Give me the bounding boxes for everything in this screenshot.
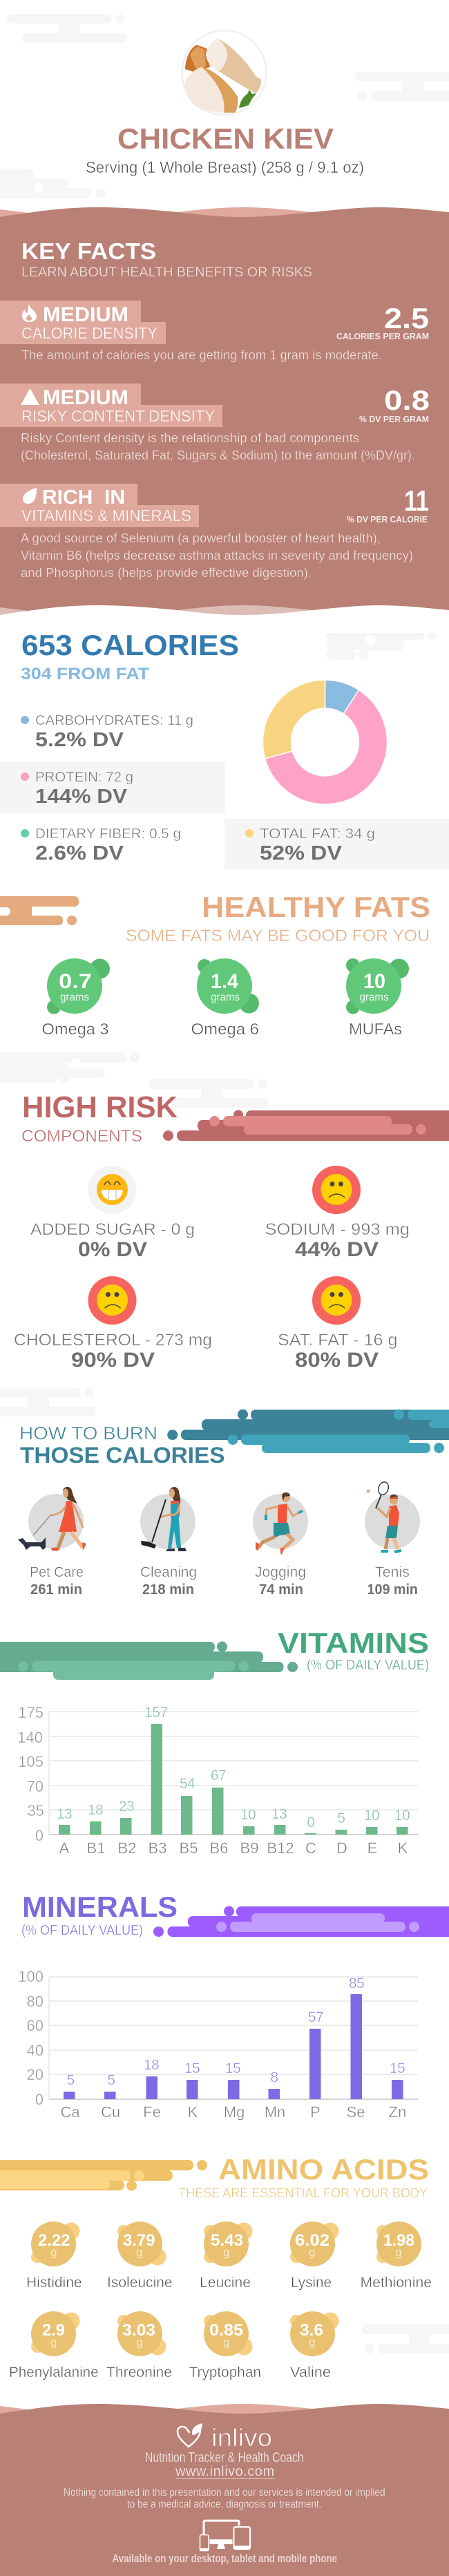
panel: high risk components (14, 1090, 449, 1372)
label: CALORIE DENSITY (21, 324, 157, 342)
badge: omega 3: grams (60, 992, 89, 1003)
bar chart: vitamins (17, 1704, 418, 1857)
bar chart: vitamins: B2 (118, 1839, 136, 1857)
logo wordmark: inlivo (211, 2423, 272, 2452)
row: carbohydrates: CARBOHYDRATES: 11 g (35, 713, 193, 728)
panel: key facts (0, 207, 449, 633)
row: dietary fiber: 2.6% DV (35, 842, 124, 864)
subheading: THESE ARE ESSENTIAL FOR YOUR BODY (178, 2186, 428, 2201)
donut chart (262, 680, 387, 804)
badge: leucine (200, 2222, 253, 2291)
description: Vitamin B6 (helps decrease asthma attacks in severity and frequency) (21, 549, 413, 562)
logo icon (178, 2423, 202, 2447)
heading: HEALTHY FATS (202, 891, 430, 923)
badge: lysine: Lysine (291, 2275, 332, 2291)
panel: amino acids (0, 2153, 432, 2380)
disclaimer: to be a medical advice, diagnosis or treatment. (127, 2499, 322, 2510)
bar chart: vitamins: B3 (149, 1839, 166, 1857)
row: carbohydrates: 5.2% DV (35, 729, 124, 751)
panel: how to burn (18, 1410, 449, 1598)
badge: methionine (361, 2222, 432, 2291)
badge: lysine: g (309, 2246, 315, 2259)
item: saturated fat (278, 1276, 398, 1372)
badge: mufas: MUFAs (349, 1020, 402, 1038)
description: and Phosphorus (helps provide effective digestion). (21, 566, 312, 580)
bar chart: vitamins: 23 (119, 1799, 134, 1815)
bar chart: minerals: 57 (308, 2009, 323, 2025)
item: sodium: SODIUM - 993 mg (265, 1220, 410, 1239)
bar chart: vitamins: A (59, 1839, 70, 1857)
badge: isoleucine (107, 2222, 173, 2291)
duration: 74 min (259, 1582, 303, 1598)
badge: tryptophan (189, 2311, 261, 2380)
icon: leaf (23, 488, 37, 504)
bar chart: vitamins: C (305, 1839, 316, 1857)
badge: isoleucine: Isoleucine (107, 2275, 173, 2291)
unit: CALORIES PER GRAM (336, 331, 429, 341)
duration: 109 min (367, 1582, 418, 1598)
bar chart: minerals: Ca (61, 2103, 80, 2121)
panel: vitamins (0, 1627, 429, 1857)
bar chart: vitamins: 157 (144, 1705, 168, 1721)
bar chart: minerals: 40 (27, 2042, 44, 2059)
bar chart: minerals: 15 (390, 2061, 405, 2076)
decorative bars (0, 896, 79, 925)
decorative bars (0, 1642, 298, 1680)
bar chart: vitamins: B6 (210, 1839, 228, 1857)
badge: histidine: Histidine (26, 2275, 82, 2291)
item: added sugar: ADDED SUGAR - 0 g (30, 1220, 195, 1239)
bar chart: minerals: 15 (225, 2061, 240, 2076)
bar chart: minerals: Cu (101, 2103, 120, 2121)
row: dietary fiber: DIETARY FIBER: 0.5 g (35, 826, 181, 842)
description: Risky Content density is the relationship of bad components (21, 431, 359, 445)
fact: calorie density (0, 301, 429, 362)
badge: mufas (346, 958, 409, 1038)
value: 2.5 (384, 302, 429, 334)
label: Cleaning (140, 1564, 197, 1580)
badge: histidine (26, 2222, 82, 2291)
bar chart: vitamins: 70 (27, 1778, 44, 1795)
badge: tryptophan: 0.85 (209, 2321, 243, 2340)
bar chart: vitamins: 175 (18, 1704, 44, 1721)
availability note: Available on your desktop, tablet and mobile phone (112, 2552, 337, 2565)
bar chart: minerals: 60 (27, 2017, 44, 2034)
label: Jogging (255, 1564, 306, 1580)
row: protein: PROTEIN: 72 g (35, 770, 133, 785)
badge: threonine: 3.03 (122, 2321, 155, 2340)
bar chart: vitamins: K (398, 1839, 408, 1857)
subheading: COMPONENTS (21, 1127, 142, 1146)
rating: MEDIUM (43, 303, 128, 326)
badge: methionine: Methionine (361, 2275, 432, 2291)
heading: 653 CALORIES (21, 629, 239, 661)
value: 11 (404, 484, 429, 517)
panel: calories (0, 629, 449, 869)
decorative bars (167, 1410, 449, 1453)
badge: mufas: grams (359, 992, 388, 1003)
bar chart: minerals: 85 (349, 1976, 364, 1991)
label: Tenis (375, 1564, 410, 1580)
bar chart: minerals: 5 (66, 2072, 75, 2088)
subheading: 304 FROM FAT (21, 665, 149, 683)
bar chart: vitamins: 105 (18, 1753, 44, 1770)
item: cholesterol (14, 1276, 212, 1372)
badge: phenylalanine: Phenylalanine (9, 2365, 99, 2380)
badge: omega 3 (41, 958, 110, 1038)
badge: phenylalanine: 2.9 (42, 2321, 65, 2340)
badge: valine: Valine (290, 2365, 331, 2380)
badge: threonine: Threonine (106, 2365, 172, 2380)
description: (Cholesterol, Saturated Fat, Sugars & Sodium) to the amount (%DV/gr). (21, 448, 415, 462)
item: saturated fat: 80% DV (295, 1349, 379, 1372)
row: dietary fiber (21, 826, 181, 864)
subheading: SOME FATS MAY BE GOOD FOR YOU (126, 927, 430, 945)
heading line 1: HOW TO BURN (19, 1423, 157, 1443)
item: sodium (265, 1166, 410, 1261)
badge: lysine (290, 2222, 338, 2291)
bar chart: vitamins: 13 (271, 1806, 287, 1822)
heading: MINERALS (22, 1891, 178, 1923)
heading line 2: THOSE CALORIES (20, 1443, 225, 1468)
badge: omega 6: grams (211, 992, 240, 1003)
bar chart: minerals: Se (347, 2103, 365, 2121)
row: total fat: 52% DV (260, 842, 343, 864)
activity: pet care (18, 1487, 86, 1598)
bar chart: vitamins: 10 (364, 1808, 379, 1824)
label: Pet Care (30, 1564, 84, 1580)
fact: vitamins and minerals (0, 484, 429, 580)
bar chart: minerals: Mg (224, 2103, 245, 2121)
badge: histidine: 2.22 (38, 2231, 70, 2250)
bar chart: minerals (18, 1968, 418, 2121)
badge: lysine: 6.02 (295, 2231, 329, 2250)
badge: omega 6: Omega 6 (191, 1020, 259, 1038)
header (86, 30, 364, 176)
bar chart: vitamins: 0 (307, 1815, 315, 1830)
bar chart: vitamins: B5 (180, 1839, 198, 1857)
panel: footer (0, 2404, 449, 2576)
row: total fat: TOTAL FAT: 34 g (260, 826, 375, 842)
subheading: LEARN ABOUT HEALTH BENEFITS OR RISKS (21, 265, 312, 280)
label: RISKY CONTENT DENSITY (21, 407, 215, 425)
activity: cleaning (140, 1487, 197, 1598)
bar chart: minerals: 5 (107, 2072, 115, 2088)
row: protein: 144% DV (35, 786, 128, 808)
badge: tryptophan: g (223, 2336, 229, 2349)
bar chart: minerals: Mn (265, 2103, 285, 2121)
bar chart: minerals: 15 (184, 2061, 200, 2076)
badge: mufas: 10 (363, 970, 385, 993)
duration: 218 min (142, 1582, 194, 1598)
bar chart: vitamins: 67 (211, 1768, 226, 1783)
bar chart: minerals: Fe (143, 2103, 161, 2121)
badge: isoleucine: g (136, 2246, 142, 2259)
icon: flame (22, 304, 37, 322)
item: cholesterol: 90% DV (71, 1349, 155, 1372)
heading: AMINO ACIDS (218, 2153, 429, 2186)
badge: leucine: Leucine (200, 2275, 251, 2291)
bar chart: vitamins: 10 (240, 1807, 256, 1823)
heading: HIGH RISK (22, 1090, 178, 1124)
rating: MEDIUM (43, 386, 128, 409)
badge: threonine: g (136, 2336, 142, 2349)
decorative bars (0, 2160, 207, 2190)
value: 0.8 (384, 386, 430, 416)
activity: tennis (365, 1481, 420, 1598)
unit: % DV PER GRAM (359, 414, 429, 424)
item: added sugar (30, 1166, 195, 1261)
tagline: Nutrition Tracker & Health Coach (145, 2450, 304, 2465)
badge: histidine: g (50, 2246, 57, 2259)
activity: jogging (253, 1493, 308, 1598)
serving size: Serving (1 Whole Breast) (258 g / 9.1 oz) (86, 158, 364, 176)
bar chart: vitamins: 35 (28, 1802, 44, 1819)
bar chart: minerals: P (310, 2103, 321, 2121)
bar chart: vitamins: 0 (35, 1827, 44, 1844)
icon: devices (200, 2521, 250, 2551)
badge: phenylalanine: g (50, 2336, 57, 2349)
decorative bars (153, 1906, 449, 1937)
badge: valine (290, 2311, 338, 2380)
unit: % DV PER CALORIE (347, 514, 428, 524)
subheading: (% OF DAILY VALUE) (307, 1658, 429, 1673)
item: saturated fat: SAT. FAT - 16 g (278, 1331, 398, 1349)
badge: phenylalanine (9, 2311, 99, 2380)
badge: omega 3: 0.7 (59, 970, 92, 993)
bar chart: vitamins: B9 (240, 1839, 258, 1857)
decorative bars (163, 1110, 449, 1141)
icon: warning (21, 388, 39, 405)
bar chart: minerals: 100 (18, 1968, 44, 1985)
bar chart: minerals: 80 (27, 1993, 44, 2010)
heading: KEY FACTS (21, 238, 156, 264)
badge: omega 6: 1.4 (211, 970, 238, 993)
badge: tryptophan: Tryptophan (189, 2365, 261, 2380)
title: CHICKEN KIEV (117, 122, 334, 155)
row: protein (0, 762, 225, 813)
bar chart: vitamins: B12 (267, 1839, 294, 1857)
duration: 261 min (30, 1582, 82, 1598)
bar chart: minerals: 20 (27, 2066, 44, 2083)
website: www.inlivo.com (175, 2464, 274, 2479)
bar chart: minerals: Zn (389, 2103, 406, 2121)
item: sodium: 44% DV (295, 1238, 379, 1261)
rating: RICH IN (42, 486, 125, 509)
bar chart: vitamins: B1 (87, 1839, 105, 1857)
bar chart: vitamins: 18 (88, 1802, 103, 1818)
bar chart: vitamins: 10 (394, 1808, 410, 1824)
badge: omega 3: Omega 3 (41, 1020, 109, 1038)
badge: methionine: 1.98 (383, 2231, 414, 2250)
fact: risky content density (0, 383, 430, 462)
disclaimer: Nothing contained in this presentation and our services is intended or implied (64, 2487, 385, 2499)
badge: threonine (106, 2311, 172, 2380)
bar chart: vitamins: 13 (57, 1806, 72, 1822)
item: added sugar: 0% DV (78, 1238, 147, 1261)
label: VITAMINS & MINERALS (21, 506, 191, 524)
badge: valine: g (309, 2336, 315, 2349)
badge: isoleucine: 3.79 (123, 2231, 155, 2250)
panel: minerals (18, 1891, 449, 2121)
panel: healthy fats (0, 891, 430, 1038)
bar chart: minerals: 8 (270, 2070, 278, 2085)
food photo (182, 30, 267, 115)
badge: leucine: 5.43 (211, 2231, 243, 2250)
bar chart: vitamins: D (336, 1839, 347, 1857)
bar chart: vitamins: 140 (17, 1729, 43, 1746)
badge: methionine: g (395, 2246, 401, 2259)
bar chart: minerals: 18 (144, 2057, 159, 2073)
badge: leucine: g (223, 2246, 229, 2259)
subheading: (% OF DAILY VALUE) (21, 1923, 143, 1938)
badge: omega 6 (191, 958, 259, 1038)
bar chart: vitamins: 54 (180, 1776, 195, 1792)
heading: VITAMINS (278, 1627, 429, 1659)
item: cholesterol: CHOLESTEROL - 273 mg (14, 1331, 212, 1349)
bar chart: minerals: 0 (35, 2091, 44, 2108)
bar chart: minerals: K (188, 2103, 198, 2121)
description: A good source of Selenium (a powerful booster of heart health), (21, 531, 381, 545)
badge: valine: 3.6 (300, 2321, 323, 2340)
description: The amount of calories you are getting from 1 gram is moderate. (21, 348, 382, 362)
row: carbohydrates (21, 713, 193, 751)
bar chart: vitamins: 5 (337, 1810, 345, 1826)
row: total fat (224, 819, 449, 869)
bar chart: vitamins: E (367, 1839, 377, 1857)
